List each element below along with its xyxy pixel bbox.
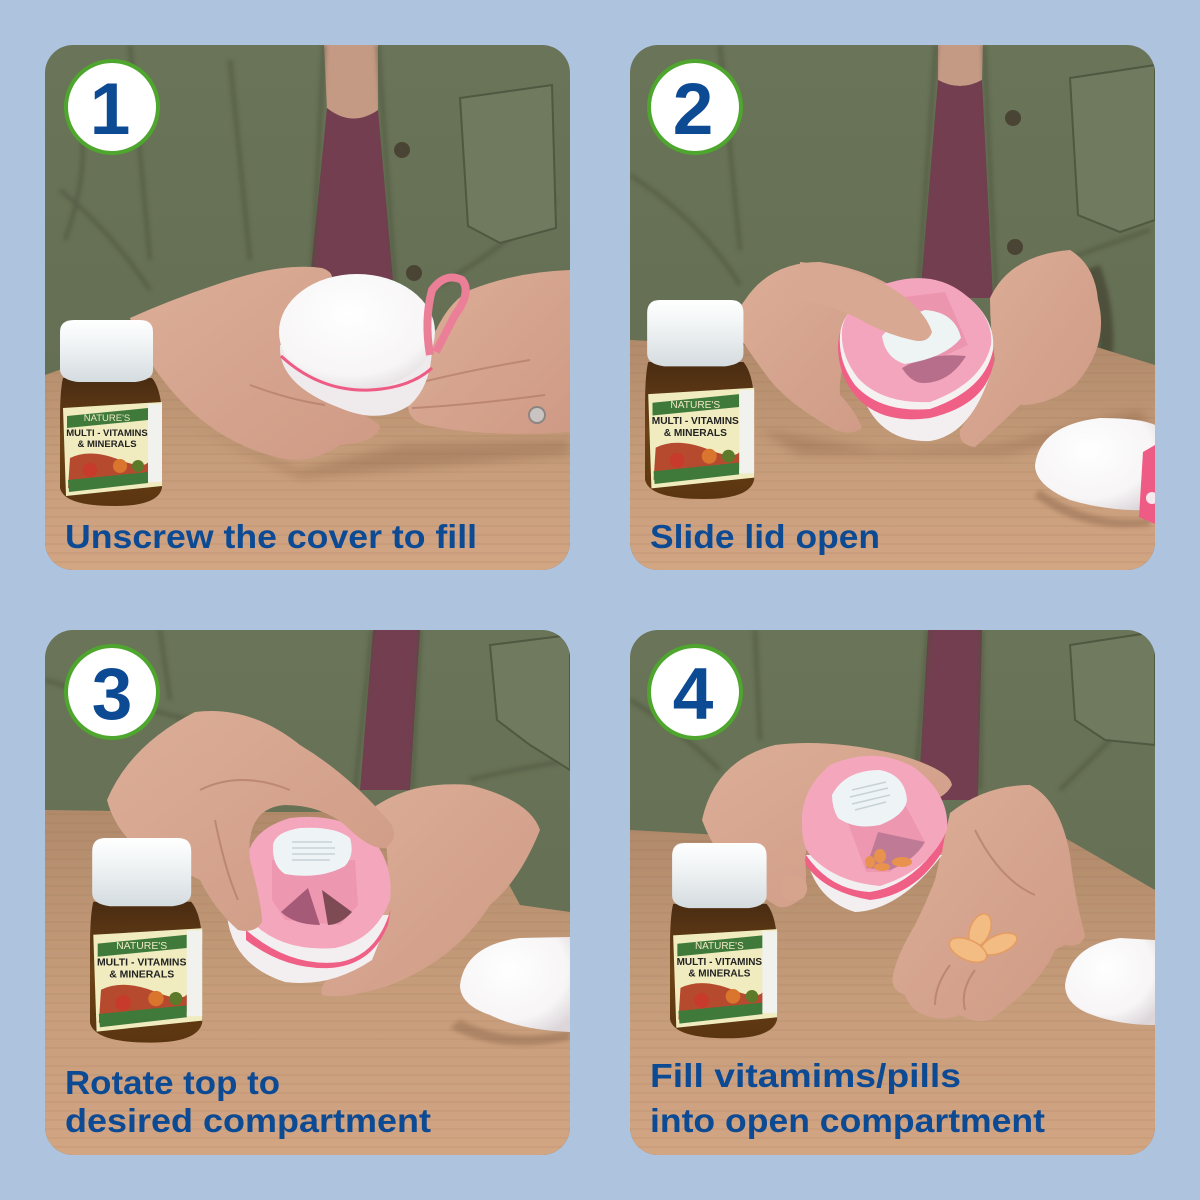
open right hand xyxy=(892,785,1085,1021)
removed cover xyxy=(460,937,570,1032)
compartment opening xyxy=(902,355,966,383)
bottle xyxy=(645,300,754,499)
shirt pocket xyxy=(490,635,570,770)
table xyxy=(630,830,1155,1155)
slider tab xyxy=(273,828,352,876)
pink pull loop xyxy=(427,278,466,355)
shirt buttons xyxy=(1005,110,1023,255)
table shadow xyxy=(450,1020,570,1045)
step 1 caption: Unscrew the cover to fill xyxy=(65,518,477,555)
bottle: NATURE'S xyxy=(84,413,130,424)
compartment openings xyxy=(281,888,320,925)
badge 4 xyxy=(649,646,741,738)
shirt pocket xyxy=(460,85,556,243)
pill container, filling xyxy=(802,756,947,912)
badge 3 xyxy=(66,646,158,738)
right hand behind container xyxy=(321,784,540,996)
thumb and fingers xyxy=(780,840,807,901)
bottle xyxy=(90,838,202,1043)
badge 4: 4 xyxy=(673,654,714,735)
pill container, open lid xyxy=(838,278,994,441)
right hand xyxy=(408,270,570,434)
bottle xyxy=(670,843,777,1038)
step 4 caption: Fill vitamims/pills xyxy=(650,1057,961,1094)
bottle: & MINERALS xyxy=(109,970,174,981)
step 3 caption: desired compartment xyxy=(65,1102,431,1139)
left hand xyxy=(130,267,380,460)
maroon undershirt xyxy=(918,630,982,800)
badge 2: 2 xyxy=(673,69,713,150)
panel: step 3 xyxy=(45,630,570,1155)
badge 3: 3 xyxy=(92,654,132,735)
bottle: NATURE'S xyxy=(116,941,167,952)
maroon undershirt xyxy=(360,630,420,790)
maroon undershirt xyxy=(310,108,393,280)
slide channel xyxy=(272,860,358,925)
badge 1: 1 xyxy=(90,69,130,150)
pressing finger xyxy=(800,262,932,341)
badge 2 xyxy=(649,61,741,153)
panel: step 1 xyxy=(45,45,570,570)
sleeve shadow xyxy=(1088,264,1114,352)
step 4 caption xyxy=(650,1057,1045,1139)
slide channel xyxy=(905,292,968,365)
table xyxy=(630,340,1155,570)
right hand xyxy=(960,250,1101,447)
bottle: MULTI - VITAMINS xyxy=(652,416,739,427)
table xyxy=(45,330,570,570)
pill container, rotating xyxy=(227,817,391,983)
step 4 caption: into open compartment xyxy=(650,1102,1045,1139)
pill container, closed xyxy=(279,274,466,416)
ring xyxy=(529,407,545,423)
step 2 caption: Slide lid open xyxy=(650,518,880,555)
pills in palm xyxy=(946,910,1020,967)
table shadows xyxy=(760,410,1150,455)
slider tab xyxy=(882,310,961,364)
bottle: & MINERALS xyxy=(77,439,137,450)
slider tab xyxy=(832,770,907,826)
removed cover xyxy=(1065,938,1155,1025)
bottle: NATURE'S xyxy=(695,941,744,952)
removed cover xyxy=(1035,418,1158,524)
bottle: MULTI - VITAMINS xyxy=(66,428,148,439)
bottle: & MINERALS xyxy=(688,968,751,979)
compartment with pills xyxy=(866,832,925,870)
neck skin xyxy=(324,45,378,120)
shirt pocket xyxy=(1070,632,1155,745)
bottle: NATURE'S xyxy=(670,400,720,411)
upper hand xyxy=(107,711,394,931)
table xyxy=(45,810,570,1155)
step 3 caption: Rotate top to xyxy=(65,1064,280,1101)
step 3 caption xyxy=(65,1064,431,1139)
back hand holding container xyxy=(702,743,952,907)
maroon undershirt xyxy=(920,80,993,298)
shirt buttons xyxy=(394,142,422,281)
neck skin xyxy=(938,45,983,86)
slide channel xyxy=(845,795,925,872)
badge 1 xyxy=(66,61,158,153)
bottle: & MINERALS xyxy=(664,428,727,439)
table shadow under hands xyxy=(256,438,570,479)
shirt pocket xyxy=(1070,65,1155,232)
bottle xyxy=(60,320,162,506)
bottle: MULTI - VITAMINS xyxy=(97,958,186,969)
bottle: MULTI - VITAMINS xyxy=(677,957,762,968)
left hand, palm xyxy=(730,262,890,433)
panel: step 4 xyxy=(630,630,1155,1155)
panel: step 2 xyxy=(630,45,1158,570)
